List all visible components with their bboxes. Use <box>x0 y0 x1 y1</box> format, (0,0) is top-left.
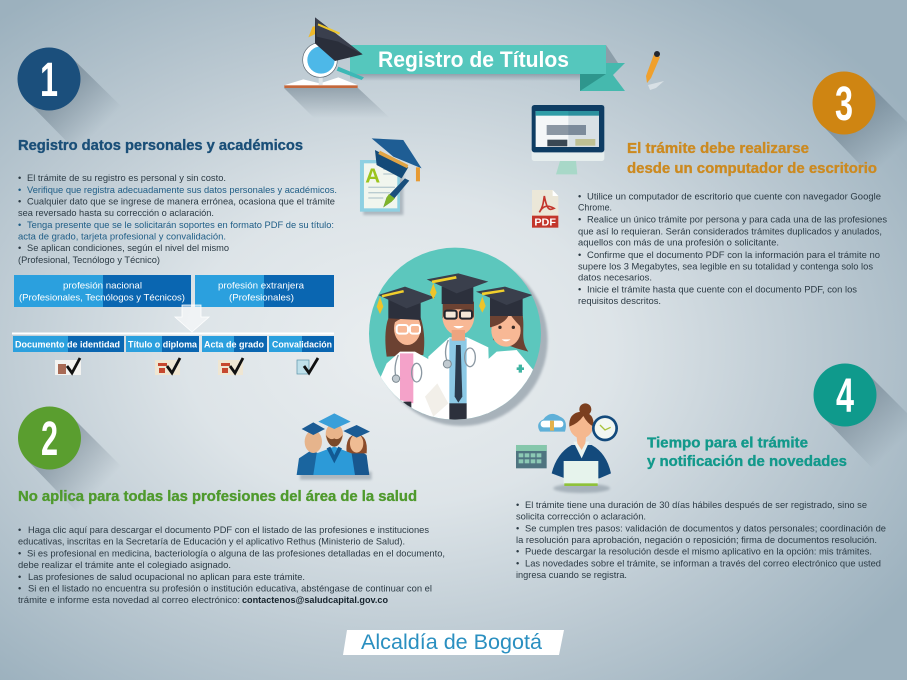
icon: validation check <box>297 358 318 374</box>
text block: step 1: El trámite de su registro es personal y sin costo. <box>27 173 226 183</box>
text block: step 4: la resolución para aprobación, negación o reposición; firma de documentos resolución. <box>516 535 877 545</box>
box: convalidación: Convalidación <box>272 340 332 350</box>
text block: step 2: contactenos@saludcapital.gov.co <box>242 595 388 605</box>
text block: step 2 <box>18 525 445 605</box>
box: profesión extranjera: (Profesionales) <box>229 292 294 302</box>
title banner <box>284 17 625 118</box>
text block: step 1: • <box>18 243 21 253</box>
icon: book, globe and graduation cap <box>284 17 364 88</box>
text block: step 2: • <box>18 572 21 582</box>
text block: step 3: Utilice un computador de escritorio que cuente con navegador Google <box>587 192 881 202</box>
text block: step 1: Verifique que registra adecuadamente sus datos personales y académicos. <box>27 185 337 195</box>
text block: step 3: • <box>578 250 581 260</box>
text block: step 2: • <box>18 525 21 535</box>
icon: graduates <box>297 413 372 480</box>
ribbon tail <box>580 63 625 91</box>
text block: step 1: Se aplican condiciones, según el nivel del mismo <box>27 243 229 253</box>
icon: diploma check <box>155 358 180 375</box>
text block: step 4: • <box>516 523 519 533</box>
logo: Alcaldía de Bogotá: Alcaldía de Bogotá <box>361 631 542 654</box>
text block: step 2: trámite e informe esta novedad al correo electrónico: <box>18 595 240 605</box>
panel: step 3 <box>532 72 907 306</box>
text block: step 4: • <box>516 547 519 557</box>
text block: step 1: • <box>18 196 21 206</box>
text block: step 3: • <box>578 192 581 202</box>
icon: diploma with cap and pen: A <box>365 165 380 188</box>
icon: PDF file: PDF <box>534 217 556 228</box>
text block: step 3: Realice un único trámite por persona y para cada una de las profesiones <box>587 214 887 224</box>
text block: step 2: debe realizar el trámite ante el colegiado asignado. <box>18 560 231 570</box>
text block: step 4: Puede descargar la resolución desde el mismo aplicativo en la opción: mis trámites. <box>525 547 872 557</box>
text block: step 3: supere los 3 Megabytes, sea legible en su totalidad y contenga solo los <box>578 262 873 272</box>
figure: left doctor <box>377 287 435 427</box>
badge 4: 4 <box>836 370 854 423</box>
box: convalidación <box>269 336 334 352</box>
box: profesión extranjera: profesión extranjera <box>218 280 305 290</box>
text block: step 2: educativas, inscritas en la Secretaría de Educación y el aplicativo Rethus (Ministerio de Salud). <box>18 537 405 547</box>
icon: diploma with cap and pen <box>360 138 422 215</box>
text block: step 3: requisitos descritos. <box>578 296 661 306</box>
icon: pencil <box>646 51 664 90</box>
text block: step 2: Si es profesional en medicina, bacteriología o alguna de las profesiones detalladas en el documento, <box>27 548 445 558</box>
text block: step 4 <box>516 500 886 580</box>
heading: tiempo para el trámite: Tiempo para el trámite <box>647 434 808 452</box>
heading: trámite computador: desde un computador de escritorio <box>627 160 877 177</box>
text block: step 4: • <box>516 500 519 510</box>
box: documento de identidad: Documento de identidad <box>15 340 120 350</box>
text block: step 1: (Profesional, Tecnólogo y Técnico) <box>18 255 160 265</box>
text block: step 3: • <box>578 284 581 294</box>
badge 1: 1 <box>40 54 58 107</box>
text block: step 2: Si en el listado no encuentra su profesión o institución educativa, absténgase de continuar con el <box>28 583 432 593</box>
heading: tiempo para el trámite <box>647 434 847 470</box>
icon: desktop computer <box>532 105 604 174</box>
heading: tiempo para el trámite: y notificación de novedades <box>647 453 847 470</box>
figure: center doctor <box>425 273 491 427</box>
panel: step 2 <box>18 406 445 605</box>
box: profesión nacional: profesión nacional <box>63 280 142 290</box>
icon: woman with laptop, clock and calendar <box>516 403 618 493</box>
text block: step 3: datos necesarios. <box>578 273 652 283</box>
text block: step 1: Tenga presente que se le solicitarán soportes en formato PDF de su título: <box>27 220 334 230</box>
text block: step 3: que así lo requieran. Serán considerados trámites duplicados y anulados, <box>578 227 882 237</box>
box: documento de identidad <box>13 336 124 352</box>
text block: step 3: aquellos con más de una profesión o solicitante. <box>578 238 779 248</box>
arrow down <box>175 305 209 332</box>
text block: step 3: Inicie el trámite hasta que cuente con el documento PDF, con los <box>587 284 857 294</box>
text block: step 1: sea reversado hasta su corrección o aclaración. <box>18 208 214 218</box>
text block: step 3: Chrome. <box>578 203 612 213</box>
text block: step 3: Confirme que el documento PDF con la información para el trámite no <box>587 250 880 260</box>
box: acta de grado: Acta de grado <box>204 340 264 350</box>
badge 3: 3 <box>835 78 853 131</box>
ribbon band <box>350 45 606 74</box>
icon: certificate check <box>218 358 243 375</box>
text block: step 4: El trámite tiene una duración de 30 días hábiles después de ser registrado, sino se <box>525 500 867 510</box>
text block: step 4: solicita corrección o aclaración. <box>516 512 646 522</box>
panel: step 4 <box>516 364 907 580</box>
box: título o diploma: Título o diploma <box>128 340 198 350</box>
text block: step 4: ingresa cuando se registra. <box>516 570 627 580</box>
heading: trámite computador: El trámite debe realizarse <box>627 140 809 157</box>
text block: step 2: Haga clic aquí para descargar el documento PDF con el listado de las profesiones e instituciones <box>28 525 429 535</box>
text block: step 1: • <box>18 173 21 183</box>
text block: step 2: Las profesiones de salud ocupacional no aplican para este trámite. <box>28 572 305 582</box>
badge 3 <box>812 72 907 180</box>
heading: registro datos: Registro datos personales y académicos <box>18 137 303 154</box>
text block: step 2: • <box>18 583 21 593</box>
text block: step 3: • <box>578 214 581 224</box>
heading: trámite computador <box>627 140 877 177</box>
box: título o diploma <box>126 336 199 352</box>
box: profesión nacional: (Profesionales, Tecnólogos y Técnicos) <box>19 292 185 302</box>
badge 2 <box>18 406 125 515</box>
box: profesión extranjera <box>195 275 334 307</box>
heading: Registro de Títulos: Registro de Títulos <box>378 47 569 72</box>
illustration: graduating health professionals <box>369 248 548 427</box>
heading: no aplica: No aplica para todas las profesiones del área de la salud <box>18 488 417 505</box>
text block: step 4: Las novedades sobre el trámite, se informan a través del correo electrónico que usted <box>525 558 881 568</box>
text block: step 4: Se cumplen tres pasos: validación de documentos y datos personales; coordinación de <box>525 523 886 533</box>
badge 1 <box>18 48 125 155</box>
badge 4 <box>814 364 907 472</box>
text block: step 4: • <box>516 558 519 568</box>
icon: id card check <box>55 358 81 375</box>
text block: step 1 <box>18 173 337 265</box>
box: acta de grado <box>202 336 267 352</box>
text block: step 1: • <box>18 220 21 230</box>
text block: step 2: • <box>18 548 21 558</box>
text block: step 1: • <box>18 185 21 195</box>
figure: right nurse <box>476 287 533 413</box>
badge 2: 2 <box>41 413 58 466</box>
text block: step 1: Cualquier dato que se ingrese de manera errónea, ocasiona que el trámite <box>27 196 335 206</box>
panel: step 1 <box>12 48 422 375</box>
icon: PDF file <box>532 190 558 228</box>
text block: step 1: acta de grado, tarjeta profesional y convalidación. <box>18 232 226 242</box>
box: profesión nacional <box>14 275 191 307</box>
table: profession types <box>12 275 334 375</box>
text block: step 3 <box>578 192 887 306</box>
